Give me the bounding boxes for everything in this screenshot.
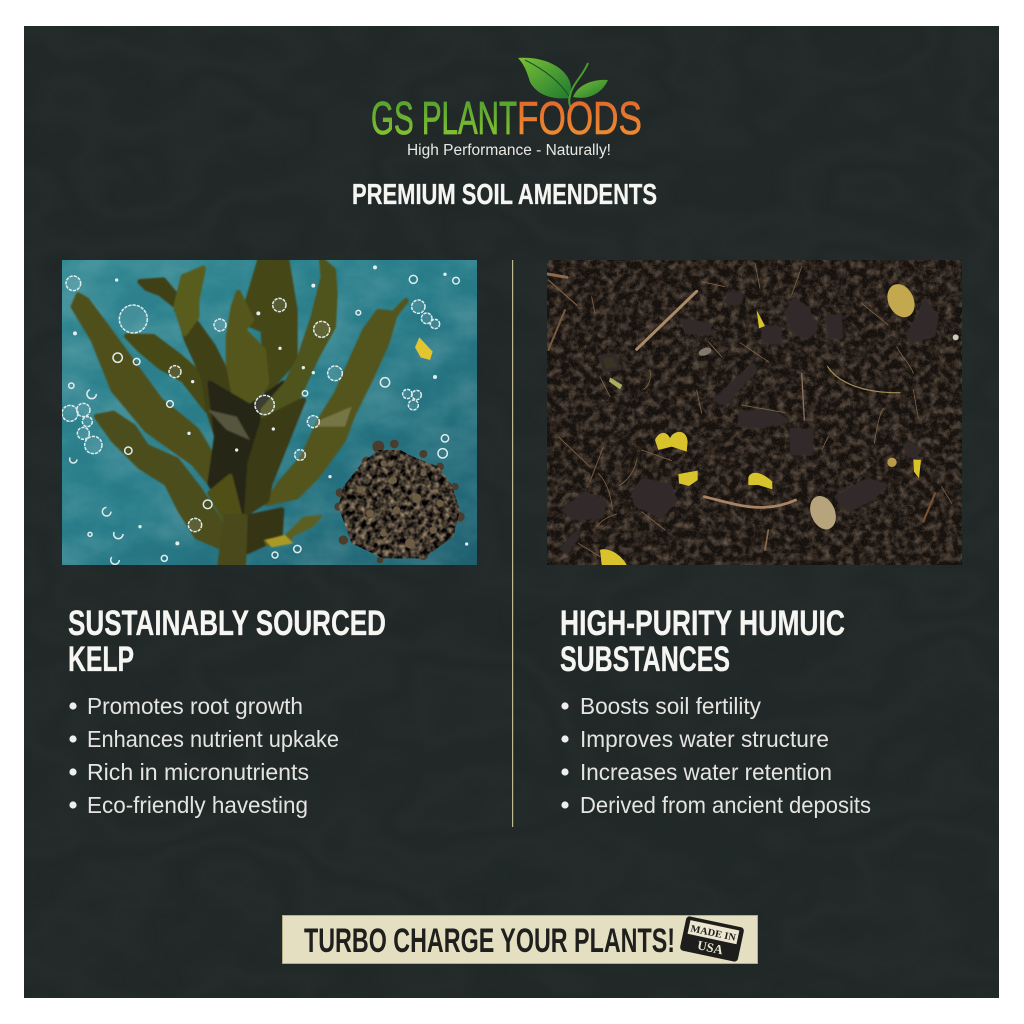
- tagline: High Performance - Naturally!: [407, 142, 611, 159]
- icon: made in USA stamp: USA: [696, 937, 725, 957]
- banner: [282, 916, 758, 964]
- icon: bubbles: [62, 275, 459, 564]
- icon: pale seed pods: [697, 280, 959, 533]
- icon: yellow leaf fragment: [415, 337, 433, 360]
- icon: twigs and roots: [548, 263, 952, 557]
- panel: soil photo: [547, 260, 962, 565]
- banner text: TURBO CHARGE YOUR PLANTS!: [304, 922, 675, 960]
- brand name: FOODS: [517, 92, 642, 144]
- icon: kelp blades: [73, 260, 406, 565]
- icon: made in USA stamp: [680, 916, 744, 962]
- heading: humic: HIGH-PURITY HUMUIC: [560, 604, 845, 643]
- list: kelp benefits: Promotes root growth: [87, 693, 303, 719]
- icon: leaves: [518, 58, 608, 111]
- list: kelp benefits: Eco-friendly havesting: [87, 792, 308, 818]
- list: kelp benefits: [69, 693, 339, 818]
- divider: [512, 260, 513, 827]
- panel: kelp photo: [62, 260, 477, 565]
- column: kelp text: [68, 604, 386, 818]
- list: humic benefits: Boosts soil fertility: [580, 693, 761, 719]
- heading: humic: SUBSTANCES: [560, 640, 730, 679]
- icon: yellow nodules: [600, 310, 921, 565]
- heading: kelp: KELP: [68, 640, 134, 679]
- list: kelp benefits: Rich in micronutrients: [87, 759, 309, 785]
- heading: kelp: [68, 604, 386, 679]
- list: humic benefits: Derived from ancient deposits: [580, 792, 871, 818]
- list: humic benefits: Increases water retention: [580, 759, 832, 785]
- icon: dark clods: [562, 293, 937, 552]
- list: kelp benefits: Enhances nutrient upkake: [87, 726, 339, 752]
- icon: made in USA stamp: MADE IN: [690, 923, 738, 944]
- brand name: GS PLANT: [371, 92, 517, 144]
- logo: [371, 58, 642, 159]
- list: humic benefits: Improves water structure: [580, 726, 829, 752]
- icon: granule pile: [334, 440, 465, 563]
- title: PREMIUM SOIL AMENDENTS: [352, 179, 657, 211]
- heading: humic: [560, 604, 845, 679]
- heading: kelp: SUSTAINABLY SOURCED: [68, 604, 386, 643]
- list: humic benefits: [561, 693, 871, 818]
- column: humic text: [560, 604, 871, 818]
